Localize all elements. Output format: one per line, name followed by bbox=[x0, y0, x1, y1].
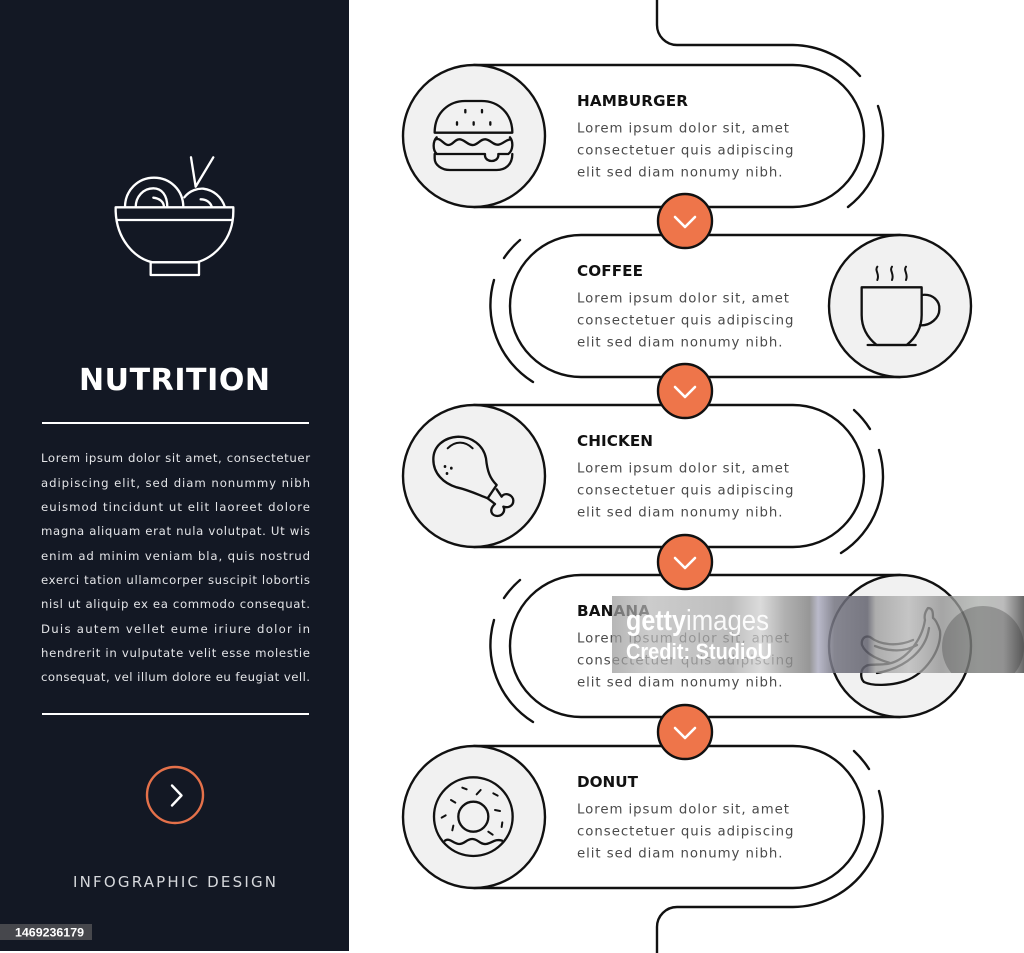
text: donut bbox=[577, 773, 794, 862]
text: hamburger bbox=[577, 92, 794, 180]
connector: coffee outer arcs bbox=[490, 240, 533, 382]
text: coffee: elit sed diam nonumy nibh. bbox=[577, 336, 782, 350]
text block: sidebar paragraph: Duis autem vellet eume iriure dolor in bbox=[41, 622, 310, 636]
text: hamburger: HAMBURGER bbox=[577, 92, 688, 110]
text: banana bbox=[577, 602, 794, 690]
text: coffee bbox=[577, 262, 794, 350]
icon: hamburger bbox=[434, 101, 512, 170]
connector: top line and hamburger outer arcs bbox=[657, 0, 883, 207]
text block: sidebar paragraph: Lorem ipsum dolor sit amet, consectetuer bbox=[41, 451, 310, 465]
text: banana: consectetuer quis adipiscing bbox=[577, 654, 794, 668]
panel: banana bbox=[510, 575, 971, 717]
text: chicken: CHICKEN bbox=[577, 432, 653, 450]
connector: donut outer arcs and bottom line bbox=[657, 751, 883, 953]
text: banana: elit sed diam nonumy nibh. bbox=[577, 676, 782, 690]
text block: sidebar paragraph: euismod tincidunt ut elit laoreet dolore bbox=[41, 500, 310, 514]
text: chicken: Lorem ipsum dolor sit, amet bbox=[577, 462, 789, 476]
connector: chicken outer arcs bbox=[841, 410, 883, 553]
watermark: getty images band bbox=[612, 596, 1024, 673]
icon: donut bbox=[434, 777, 513, 856]
panel: nutrition sidebar bbox=[0, 0, 349, 951]
text: donut: elit sed diam nonumy nibh. bbox=[577, 846, 782, 862]
text: chicken: consectetuer quis adipiscing bbox=[577, 484, 794, 498]
text: coffee: Lorem ipsum dolor sit, amet bbox=[577, 292, 789, 306]
text: chicken: elit sed diam nonumy nibh. bbox=[577, 506, 782, 520]
text: donut: Lorem ipsum dolor sit, amet bbox=[577, 802, 789, 818]
panel: hamburger bbox=[403, 65, 864, 207]
panel: coffee bbox=[510, 235, 971, 377]
text: chicken bbox=[577, 432, 794, 520]
text: banana: Lorem ipsum dolor sit, amet bbox=[577, 632, 789, 646]
icon: orange chevron connector 1 bbox=[658, 194, 712, 248]
heading: nutrition: NUTRITION bbox=[79, 363, 270, 398]
icon: orange chevron connector 3 bbox=[658, 535, 712, 589]
text: donut: DONUT bbox=[577, 773, 639, 791]
watermark: getty images band: getty bbox=[626, 605, 686, 637]
text block: sidebar paragraph: consequat, vel illum dolore eu feugiat vell. bbox=[41, 670, 310, 684]
panel: donut bbox=[403, 746, 864, 888]
watermark: getty images band: images bbox=[686, 605, 769, 637]
text: hamburger: Lorem ipsum dolor sit, amet bbox=[577, 122, 789, 136]
text block: sidebar paragraph: adipiscing elit, sed diam nonummy nibh bbox=[41, 476, 310, 490]
connector: banana outer arcs bbox=[490, 580, 533, 722]
text block: sidebar paragraph: hendrerit in vulputate velit esse molestie bbox=[41, 646, 310, 660]
icon: orange chevron connector 2 bbox=[658, 364, 712, 418]
text block: sidebar paragraph: nisl ut aliquip ex ea commodo consequat. bbox=[41, 597, 310, 611]
text block: sidebar paragraph: exerci tation ullamcorper suscipit lobortis bbox=[41, 573, 310, 587]
icon: noodle bowl bbox=[116, 157, 233, 275]
text: hamburger: elit sed diam nonumy nibh. bbox=[577, 166, 782, 180]
label: image id: 1469236179 bbox=[15, 926, 84, 940]
text: donut: consectetuer quis adipiscing bbox=[577, 824, 794, 840]
text: hamburger: consectetuer quis adipiscing bbox=[577, 144, 794, 158]
label: image id bbox=[0, 924, 92, 940]
icon: orange chevron connector 4 bbox=[658, 705, 712, 759]
text: coffee: COFFEE bbox=[577, 262, 643, 280]
panel: chicken bbox=[403, 405, 864, 547]
watermark: getty images band: Credit: StudioU bbox=[626, 639, 772, 664]
text block: sidebar paragraph bbox=[41, 451, 310, 684]
text: banana: BANANA bbox=[577, 602, 650, 620]
icon: coffee cup bbox=[862, 267, 939, 345]
text block: sidebar paragraph: enim ad minim veniam bla, quis nostrud bbox=[41, 549, 310, 563]
text block: sidebar paragraph: magna aliquam erat nula volutpat. Ut wis bbox=[41, 524, 310, 538]
icon: next arrow button bbox=[147, 767, 203, 823]
caption: infographic design: INFOGRAPHIC DESIGN bbox=[73, 873, 276, 891]
text: coffee: consectetuer quis adipiscing bbox=[577, 314, 794, 328]
icon: banana bbox=[861, 608, 940, 685]
icon: chicken drumstick bbox=[433, 437, 513, 516]
